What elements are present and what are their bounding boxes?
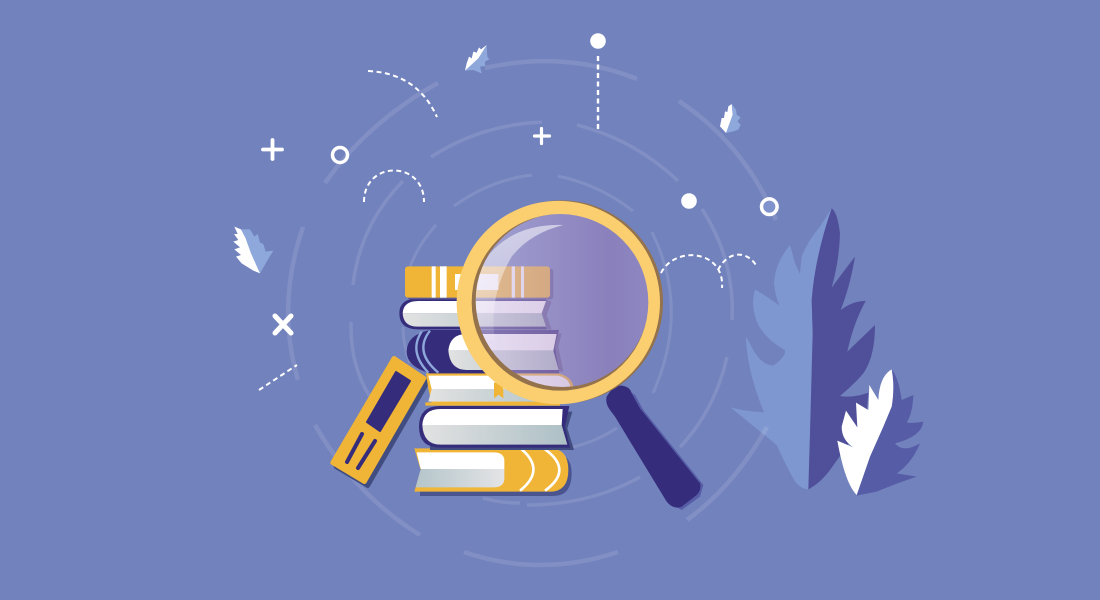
- decorative symbols: [263, 33, 777, 333]
- book 5: navy book with white pages: [419, 406, 574, 450]
- large plant leaf: [731, 208, 923, 496]
- outer ring arcs: [288, 61, 776, 565]
- feather blue half: [465, 45, 489, 73]
- book 1: top yellow book: [405, 266, 553, 299]
- feather blue half: [241, 229, 273, 273]
- magnifier lens: [471, 214, 649, 391]
- dashed arc right large: [661, 255, 722, 288]
- feather blue half: [726, 104, 741, 133]
- bookmark card: [333, 358, 427, 486]
- dashed diagonal line: [259, 365, 297, 390]
- large leaf: dark half: [808, 208, 875, 489]
- ring left: [332, 148, 348, 162]
- feather white half: [465, 45, 487, 71]
- book 3: navy spine book with blue stripes: [407, 330, 563, 373]
- small leaf: dark half: [857, 369, 923, 496]
- ring right: [762, 199, 777, 214]
- cross left: [275, 316, 291, 333]
- concentric background arcs: [288, 61, 776, 565]
- feather white half: [720, 104, 733, 133]
- large leaf: light half: [731, 208, 832, 489]
- dashed arc left: [364, 170, 424, 202]
- small feather left: [233, 227, 273, 273]
- middle ring arcs: [351, 122, 732, 505]
- small feather right: [720, 104, 741, 133]
- dashed arc top left: [368, 71, 437, 117]
- dot top: [590, 33, 606, 49]
- magnifier handle: [606, 386, 703, 510]
- book 6: bottom yellow book: [414, 448, 572, 496]
- plus centre: [534, 128, 550, 144]
- small leaf: white half: [837, 369, 893, 495]
- inner ring arcs: [403, 175, 671, 447]
- dot right: [681, 193, 697, 209]
- dashed arc right small: [718, 255, 757, 270]
- book 4: yellow trim book with ribbon: [425, 373, 574, 406]
- magnifier rim shadow: [460, 200, 663, 404]
- dashed white paths: [259, 56, 757, 390]
- dashed vertical line: [597, 56, 599, 130]
- magnifier yellow rim: [457, 201, 660, 404]
- books and magnifier: [333, 200, 703, 510]
- lens glare: [474, 225, 563, 340]
- book 2: white pages book: [399, 298, 552, 329]
- feather white half: [233, 227, 260, 273]
- plus left: [263, 140, 282, 159]
- small feather top: [465, 45, 489, 73]
